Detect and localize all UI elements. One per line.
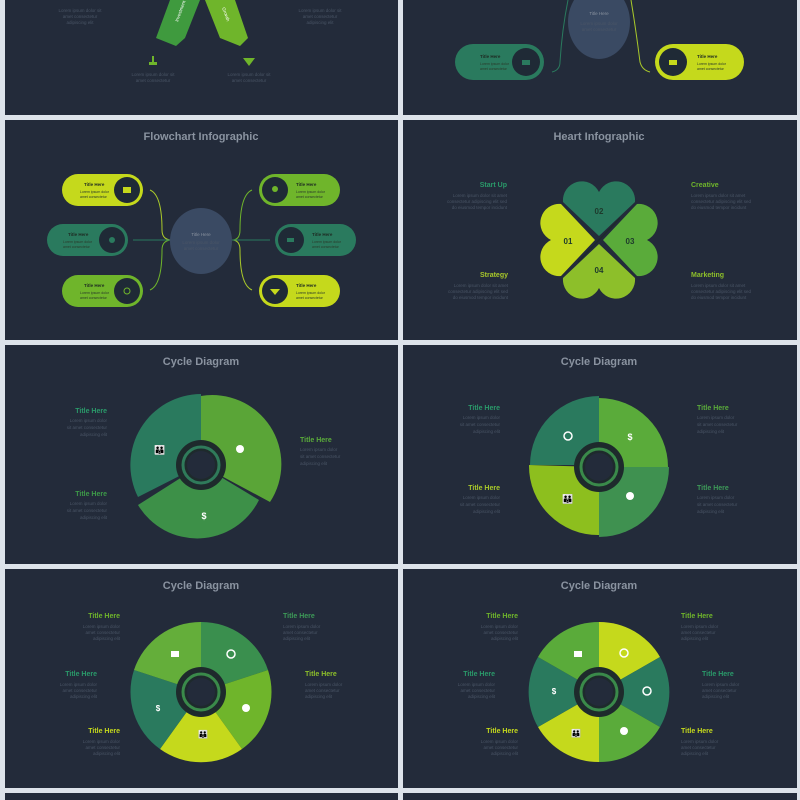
pie chart 6: $ [552, 687, 557, 696]
text blocks: Title Here [681, 613, 713, 620]
text blocks: adipiscing elit [697, 509, 725, 514]
center circle: Lorem ipsum dolor [580, 21, 618, 26]
center circle: Title Here [589, 11, 609, 16]
pie chart 6 [529, 622, 669, 762]
text blocks [67, 408, 341, 520]
pill left: Title Here [480, 54, 501, 59]
panel: cycle diagram 4 [403, 345, 797, 564]
text blocks [460, 405, 738, 514]
text: marketing: Marketing [691, 272, 724, 279]
text blocks: Title Here [697, 485, 729, 492]
text: strategy: do eiusmod tempor incidunt [453, 295, 509, 300]
text blocks: Title Here [486, 613, 518, 620]
text blocks: Lorem ipsum dolor [697, 415, 735, 420]
panel: ribbon (top-left, partial) [5, 0, 398, 115]
text blocks: sit amet consectetur [67, 425, 107, 430]
pie chart 4: $ [627, 432, 633, 442]
pill left: Lorem ipsum dolor [480, 62, 510, 66]
text: strategy [448, 272, 509, 300]
text blocks: Lorem ipsum dolor [681, 624, 719, 629]
text blocks: Title Here [300, 437, 332, 444]
text blocks: Lorem ipsum dolor [70, 501, 108, 506]
text block bottom: Lorem ipsum dolor sit [131, 72, 175, 77]
text: start up: Lorem ipsum dolor sit amet [453, 193, 508, 198]
text blocks: Title Here [283, 613, 315, 620]
text: marketing: Lorem ipsum dolor sit amet [691, 283, 746, 288]
text block left: adipiscing elit [66, 20, 94, 25]
center circle: Lorem ipsum dolor [182, 240, 220, 245]
text blocks: adipiscing elit [305, 694, 333, 699]
pill: right bottom [259, 275, 340, 307]
pill: right middle: Title Here [312, 232, 333, 237]
text blocks: Lorem ipsum dolor [300, 447, 338, 452]
text blocks: Title Here [88, 613, 120, 620]
pill: right top: amet consectetur [296, 195, 324, 199]
text: start up: Start Up [480, 182, 507, 189]
text: start up: do eiusmod tempor incidunt [452, 205, 508, 210]
panel: flowchart infographic [5, 120, 398, 340]
pill: right top: Title Here [296, 182, 317, 187]
ribbon: investment: Investment [174, 0, 187, 22]
text: strategy: Lorem ipsum dolor sit amet [454, 283, 509, 288]
center circle [568, 0, 630, 59]
text: creative: do eiusmod tempor incidunt [691, 205, 747, 210]
ribbon: growth [205, 0, 248, 46]
text blocks: Lorem ipsum dolor [463, 495, 501, 500]
pie chart 5 [130, 622, 272, 762]
pill right: Title Here [697, 54, 718, 59]
pill: right middle: Lorem ipsum dolor [312, 240, 342, 244]
text blocks: Lorem ipsum dolor [70, 418, 108, 423]
panel: cycle diagram 3 [5, 345, 398, 564]
text blocks: adipiscing elit [491, 636, 519, 641]
text blocks [60, 613, 343, 756]
pill right: amet consectetur [697, 67, 725, 71]
text block right: adipiscing elit [306, 20, 334, 25]
pill right [655, 44, 744, 80]
pill: right top: Lorem ipsum dolor [296, 190, 326, 194]
text blocks: sit amet consectetur [300, 454, 341, 459]
panel: cycle diagram 6 [403, 569, 797, 788]
pie chart 5: 👪 [198, 729, 208, 739]
text blocks: sit amet consectetur [697, 502, 738, 507]
pill: right middle: amet consectetur [312, 245, 340, 249]
title: Heart Infographic [553, 131, 645, 143]
pie chart 5: $ [156, 704, 161, 713]
text: start up [447, 182, 508, 210]
pill: left bottom: Lorem ipsum dolor [80, 291, 110, 295]
clover chart [540, 181, 658, 299]
text blocks: Title Here [75, 408, 107, 415]
text blocks: adipiscing elit [491, 751, 519, 756]
text block left [58, 8, 102, 25]
center circle: Title Here [191, 232, 211, 237]
text: creative [691, 182, 752, 210]
text blocks: Title Here [463, 671, 495, 678]
text: creative: Creative [691, 182, 719, 189]
text: strategy: consectetur adipiscing elit sed [448, 289, 508, 294]
pill: right top [259, 174, 340, 206]
panel: heart infographic [403, 120, 797, 340]
text block bottom [131, 72, 271, 83]
text blocks: amet consectetur [483, 745, 518, 750]
title: Flowchart Infographic [144, 131, 258, 143]
text blocks: adipiscing elit [697, 429, 725, 434]
panel: bottom partial left [5, 793, 398, 800]
pill: right middle [275, 224, 356, 256]
text blocks: Lorem ipsum dolor [60, 682, 98, 687]
pill: left bottom: amet consectetur [80, 296, 108, 300]
text blocks: amet consectetur [460, 688, 495, 693]
text blocks: Title Here [697, 405, 729, 412]
text blocks: adipiscing elit [80, 515, 108, 520]
ribbon: growth: Growth [221, 7, 231, 22]
pill: left bottom [62, 275, 143, 307]
text blocks: Lorem ipsum dolor [481, 739, 519, 744]
text blocks: adipiscing elit [93, 636, 121, 641]
text blocks: Title Here [681, 728, 713, 735]
pie chart 6: 👪 [571, 728, 581, 738]
icon: plant [149, 56, 157, 65]
text blocks: amet consectetur [681, 630, 716, 635]
text blocks: amet consectetur [305, 688, 340, 693]
connectors [552, 0, 650, 72]
text blocks: Title Here [468, 405, 500, 412]
text block right [298, 8, 342, 25]
pill: left top [62, 174, 143, 206]
title: Cycle Diagram [163, 580, 239, 592]
pill: right bottom: Title Here [296, 283, 317, 288]
text: start up: consectetur adipiscing elit sed [447, 199, 507, 204]
text blocks: sit amet consectetur [67, 508, 107, 513]
text blocks: Title Here [75, 491, 107, 498]
text blocks: adipiscing elit [681, 751, 709, 756]
pill: left bottom: Title Here [84, 283, 105, 288]
pill: left top: amet consectetur [80, 195, 108, 199]
pie chart 4: 👪 [562, 493, 574, 504]
text block left: amet consectetur [63, 14, 98, 19]
text blocks: adipiscing elit [702, 694, 730, 699]
text blocks: sit amet consectetur [460, 422, 500, 427]
text blocks: adipiscing elit [473, 509, 501, 514]
text blocks: amet consectetur [62, 688, 97, 693]
text blocks: amet consectetur [483, 630, 518, 635]
panel: cycle diagram 5 [5, 569, 398, 788]
text blocks: amet consectetur [85, 745, 120, 750]
pill left: amet consectetur [480, 67, 508, 71]
pie chart 4 [529, 396, 669, 537]
text: strategy: Strategy [480, 272, 508, 279]
text blocks: Title Here [305, 671, 337, 678]
pill: right bottom: amet consectetur [296, 296, 324, 300]
text blocks: Lorem ipsum dolor [458, 682, 496, 687]
text blocks: Lorem ipsum dolor [702, 682, 740, 687]
text blocks: amet consectetur [681, 745, 716, 750]
text blocks: Title Here [88, 728, 120, 735]
text blocks: Lorem ipsum dolor [481, 624, 519, 629]
pie chart 3: 👪 [154, 444, 166, 455]
pie chart 3: $ [201, 511, 207, 521]
text block bottom: Lorem ipsum dolor sit [227, 72, 271, 77]
text: marketing: consectetur adipiscing elit sed [691, 289, 752, 294]
text blocks: adipiscing elit [70, 694, 98, 699]
pill left [455, 44, 544, 80]
text blocks: Lorem ipsum dolor [697, 495, 735, 500]
text blocks: adipiscing elit [80, 432, 108, 437]
text block left: Lorem ipsum dolor sit [58, 8, 102, 13]
clover chart: 02 [595, 207, 604, 216]
icon: handshake [243, 58, 255, 66]
title: Cycle Diagram [561, 356, 637, 368]
clover chart: 04 [595, 266, 604, 275]
pill: left middle: Lorem ipsum dolor [63, 240, 93, 244]
text blocks: Lorem ipsum dolor [463, 415, 501, 420]
text block bottom: amet consectetur [136, 78, 171, 83]
text blocks: Title Here [468, 485, 500, 492]
title: Cycle Diagram [163, 356, 239, 368]
text blocks: adipiscing elit [283, 636, 311, 641]
center circle [170, 208, 232, 274]
text: creative: Lorem ipsum dolor sit amet [691, 193, 746, 198]
text: marketing: do eiusmod tempor incidunt [691, 295, 747, 300]
title: Cycle Diagram [561, 580, 637, 592]
panel: flowchart partial (top-right) [403, 0, 797, 115]
clover chart: 03 [626, 237, 635, 246]
text blocks: adipiscing elit [300, 461, 328, 466]
text blocks: amet consectetur [702, 688, 737, 693]
pill: right bottom: Lorem ipsum dolor [296, 291, 326, 295]
text blocks [458, 613, 740, 756]
text blocks: amet consectetur [283, 630, 318, 635]
text blocks: Title Here [702, 671, 734, 678]
text block right: amet consectetur [303, 14, 338, 19]
pill: left middle: Title Here [68, 232, 89, 237]
pill right: Lorem ipsum dolor [697, 62, 727, 66]
text blocks: adipiscing elit [93, 751, 121, 756]
text blocks: sit amet consectetur [460, 502, 500, 507]
pie chart 3 [130, 394, 281, 538]
ribbon: investment [156, 0, 200, 46]
text blocks: adipiscing elit [473, 429, 501, 434]
text: marketing [691, 272, 752, 300]
panel: bottom partial right [403, 793, 797, 800]
text blocks: Lorem ipsum dolor [83, 739, 121, 744]
text blocks: Lorem ipsum dolor [83, 624, 121, 629]
text blocks: adipiscing elit [468, 694, 496, 699]
text block bottom: amet consectetur [232, 78, 267, 83]
pill: left top: Title Here [84, 182, 105, 187]
text blocks: Title Here [486, 728, 518, 735]
clover chart: 01 [564, 237, 573, 246]
text: creative: consectetur adipiscing elit sed [691, 199, 752, 204]
pill: left middle [47, 224, 128, 256]
text blocks: Title Here [65, 671, 97, 678]
text blocks: amet consectetur [85, 630, 120, 635]
center circle: amet consectetur [582, 27, 617, 32]
pill: left top: Lorem ipsum dolor [80, 190, 110, 194]
text blocks: Lorem ipsum dolor [283, 624, 321, 629]
text blocks: Lorem ipsum dolor [681, 739, 719, 744]
text blocks: Lorem ipsum dolor [305, 682, 343, 687]
text block right: Lorem ipsum dolor sit [298, 8, 342, 13]
connectors [133, 190, 270, 290]
pill: left middle: amet consectetur [63, 245, 91, 249]
center circle: amet consectetur [184, 246, 219, 251]
text blocks: adipiscing elit [681, 636, 709, 641]
text blocks: sit amet consectetur [697, 422, 738, 427]
